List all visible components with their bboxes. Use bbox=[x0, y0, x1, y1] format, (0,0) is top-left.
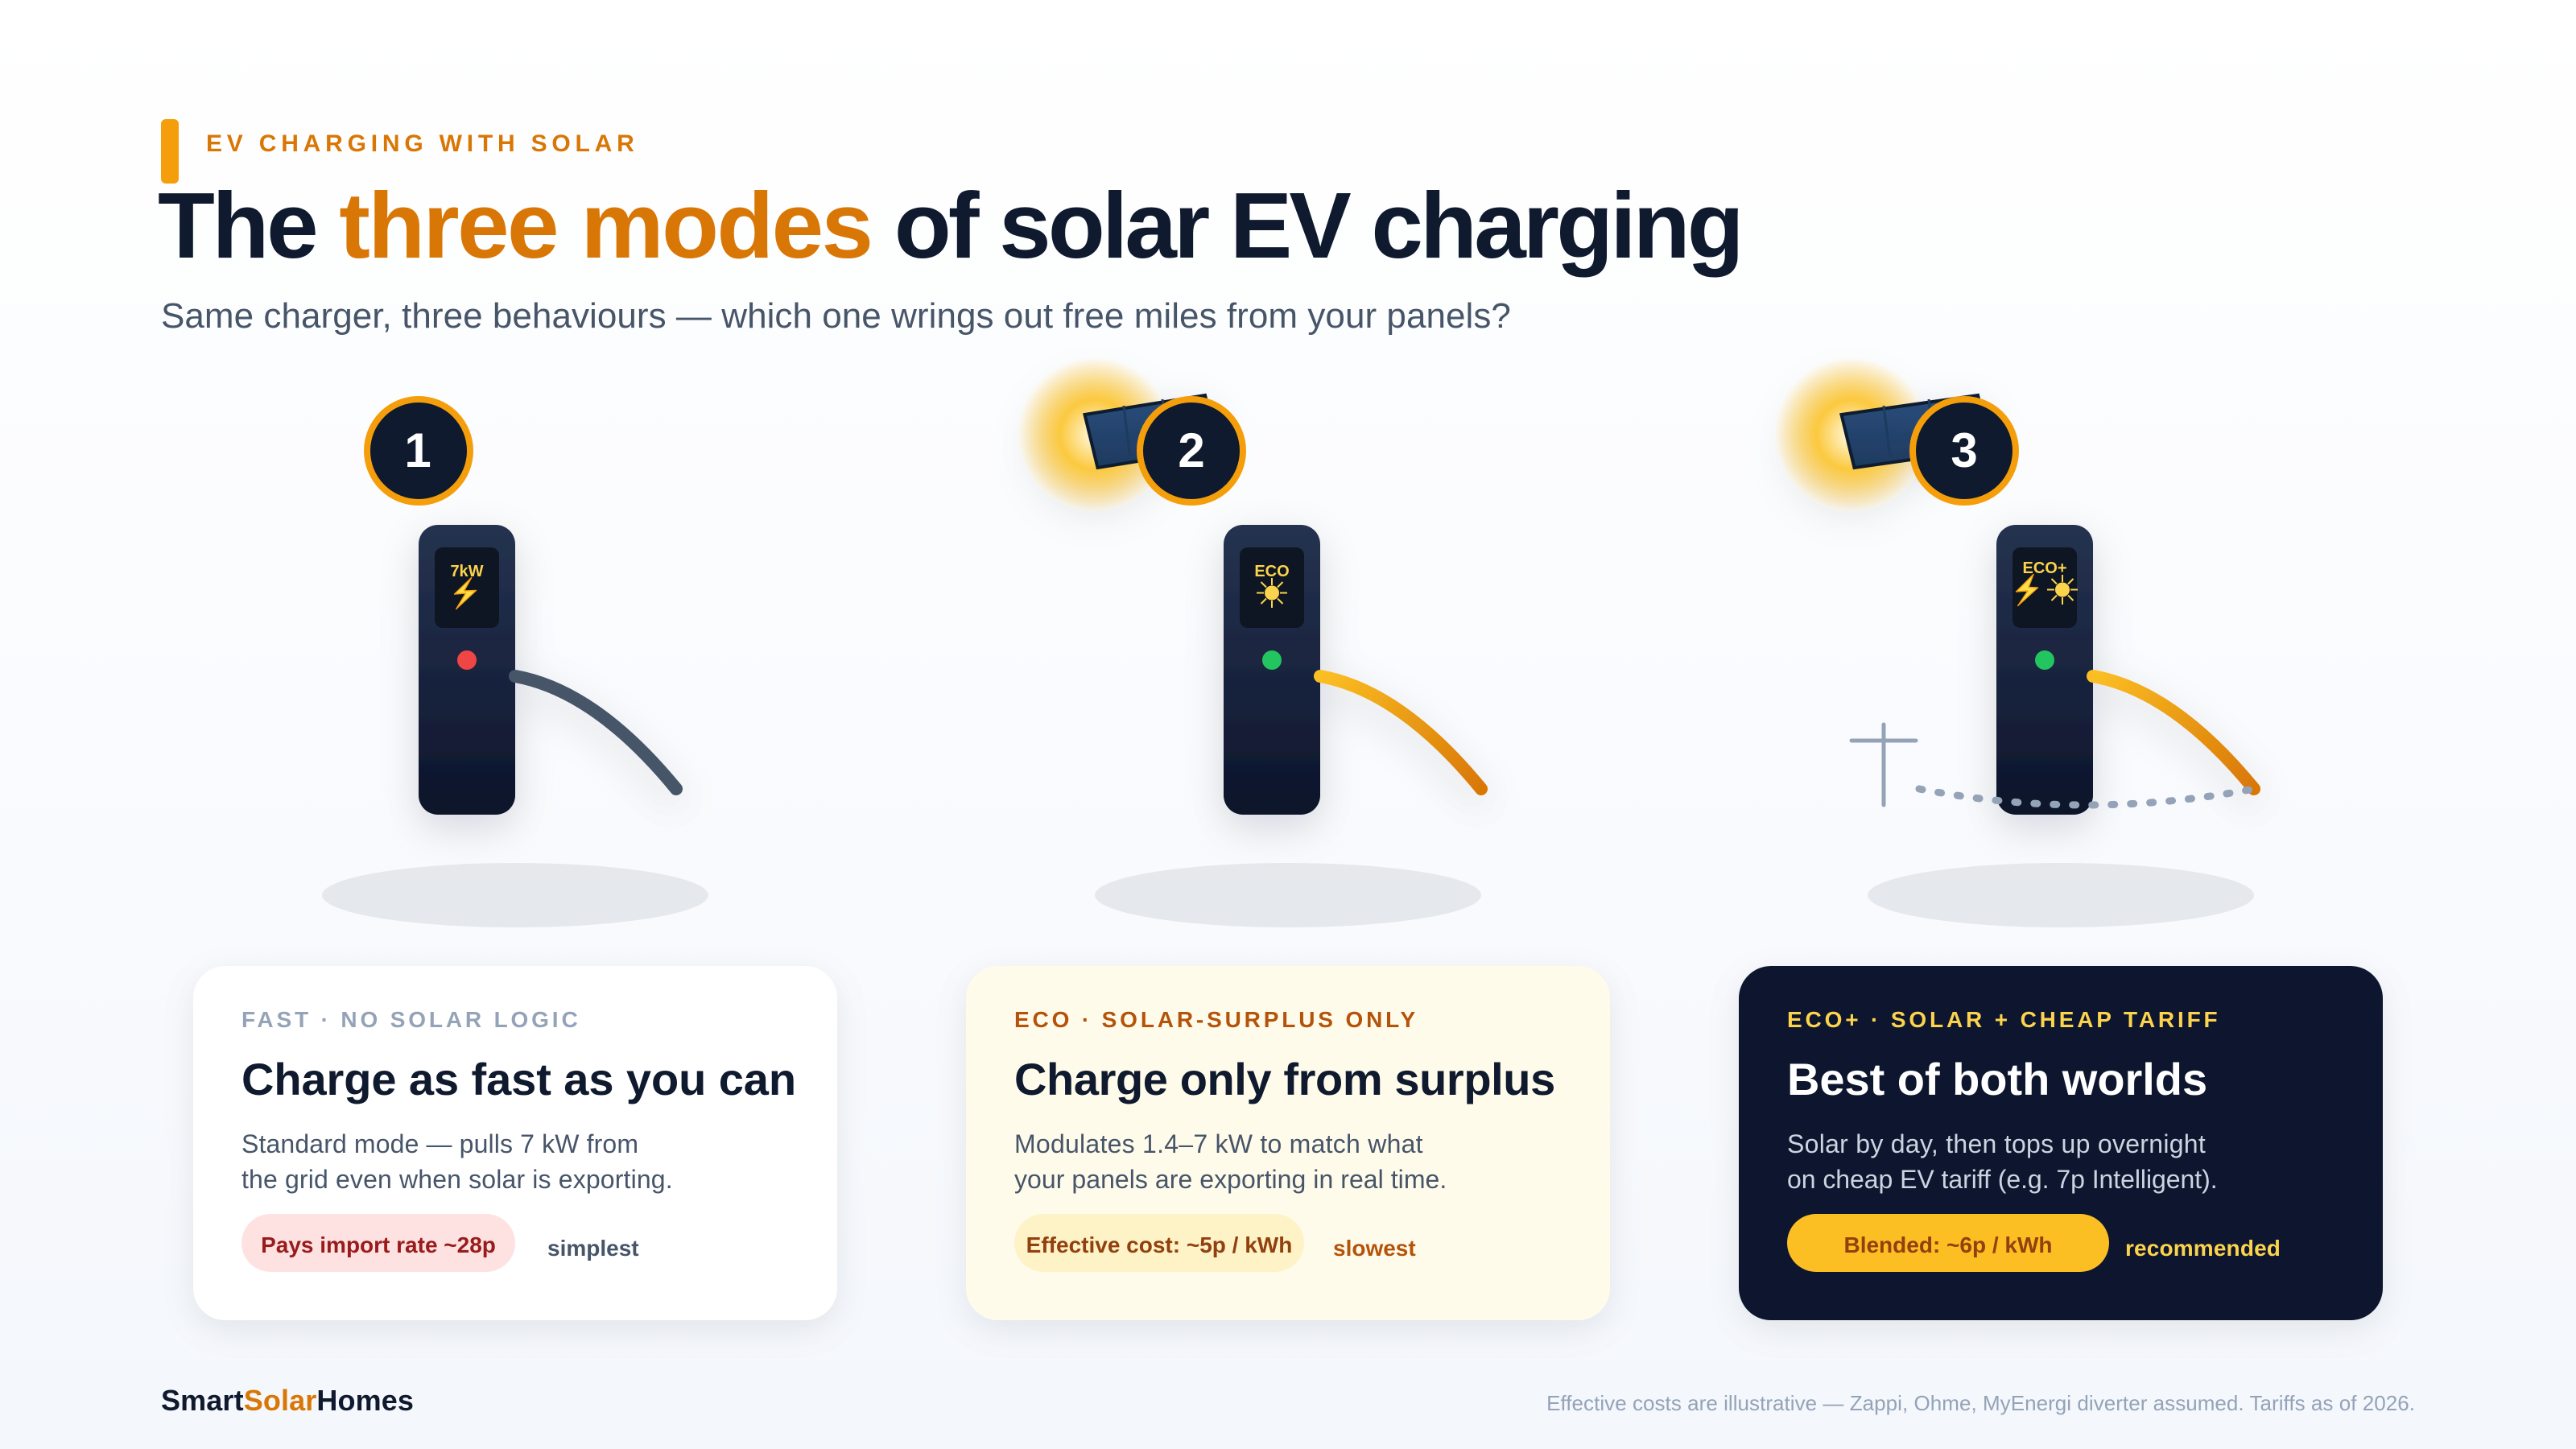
header accent bar bbox=[161, 119, 179, 184]
badge 2 bbox=[1140, 399, 1243, 502]
subtitle: Same charger, three behaviours — which one wrings out free miles from your panels? bbox=[161, 296, 1511, 336]
charger unit bbox=[1224, 525, 1481, 815]
card 3 label: ECO+ · SOLAR + CHEAP TARIFF bbox=[1787, 1007, 2221, 1032]
card 2 body: your panels are exporting in real time. bbox=[1014, 1165, 1447, 1194]
card 3 tag: recommended bbox=[2125, 1236, 2281, 1261]
badge 1: 1 bbox=[404, 423, 431, 477]
card 1 body: Standard mode — pulls 7 kW from bbox=[242, 1129, 638, 1158]
card 2 heading: Charge only from surplus bbox=[1014, 1054, 1555, 1104]
card 2 body: Modulates 1.4–7 kW to match what bbox=[1014, 1129, 1423, 1158]
card 1 label: FAST · NO SOLAR LOGIC bbox=[242, 1007, 581, 1032]
card 3 body: Solar by day, then tops up overnight bbox=[1787, 1129, 2206, 1158]
charger unit: ECO bbox=[1254, 563, 1290, 580]
card 1 pill: Pays import rate ~28p bbox=[261, 1232, 496, 1257]
card 1 heading: Charge as fast as you can bbox=[242, 1054, 796, 1104]
charger unit bbox=[419, 525, 676, 815]
mode 3 illustration bbox=[1774, 357, 2254, 927]
mode 2 illustration bbox=[1018, 357, 1481, 927]
card 1 tag: simplest bbox=[547, 1236, 639, 1261]
card 1 pill bbox=[242, 1214, 515, 1272]
card 1 body: the grid even when solar is exporting. bbox=[242, 1165, 673, 1194]
card 3 body: on cheap EV tariff (e.g. 7p Intelligent). bbox=[1787, 1165, 2218, 1194]
charger unit: 7kW bbox=[450, 563, 484, 580]
mode 1 illustration bbox=[322, 399, 708, 927]
dotted off-peak grid line bbox=[1919, 789, 2254, 805]
sun and solar panel bbox=[1774, 357, 1991, 512]
card 2 pill bbox=[1014, 1214, 1304, 1272]
card 3 pill bbox=[1787, 1214, 2109, 1272]
card 2 label: ECO · SOLAR-SURPLUS ONLY bbox=[1014, 1007, 1418, 1032]
title: The three modes of solar EV charging bbox=[158, 173, 1741, 278]
ground shadow bbox=[322, 863, 708, 927]
ground shadow bbox=[1095, 863, 1481, 927]
charger unit: ECO+ bbox=[2022, 559, 2067, 577]
card 2 pill: Effective cost: ~5p / kWh bbox=[1026, 1232, 1292, 1257]
charger unit bbox=[1996, 525, 2254, 815]
card 2 tag: slowest bbox=[1333, 1236, 1416, 1261]
panel: fast mode card bbox=[193, 966, 837, 1320]
badge 3: 3 bbox=[1951, 423, 1978, 477]
badge 2: 2 bbox=[1178, 423, 1205, 477]
eyebrow label: EV CHARGING WITH SOLAR bbox=[206, 130, 639, 157]
card 3 pill: Blended: ~6p / kWh bbox=[1843, 1232, 2053, 1257]
badge 3 bbox=[1913, 399, 2016, 502]
badge 1 bbox=[367, 399, 470, 502]
panel: eco+ mode card bbox=[1739, 966, 2383, 1320]
brand: SmartSolarHomes bbox=[161, 1384, 414, 1417]
grid pole bbox=[1852, 724, 1916, 805]
card 3 heading: Best of both worlds bbox=[1787, 1054, 2207, 1104]
panel: eco mode card bbox=[966, 966, 1610, 1320]
sun and solar panel bbox=[1018, 357, 1218, 512]
ground shadow bbox=[1868, 863, 2254, 927]
footnote: Effective costs are illustrative — Zappi, Ohme, MyEnergi diverter assumed. Tariffs as of 2026. bbox=[1546, 1391, 2415, 1415]
